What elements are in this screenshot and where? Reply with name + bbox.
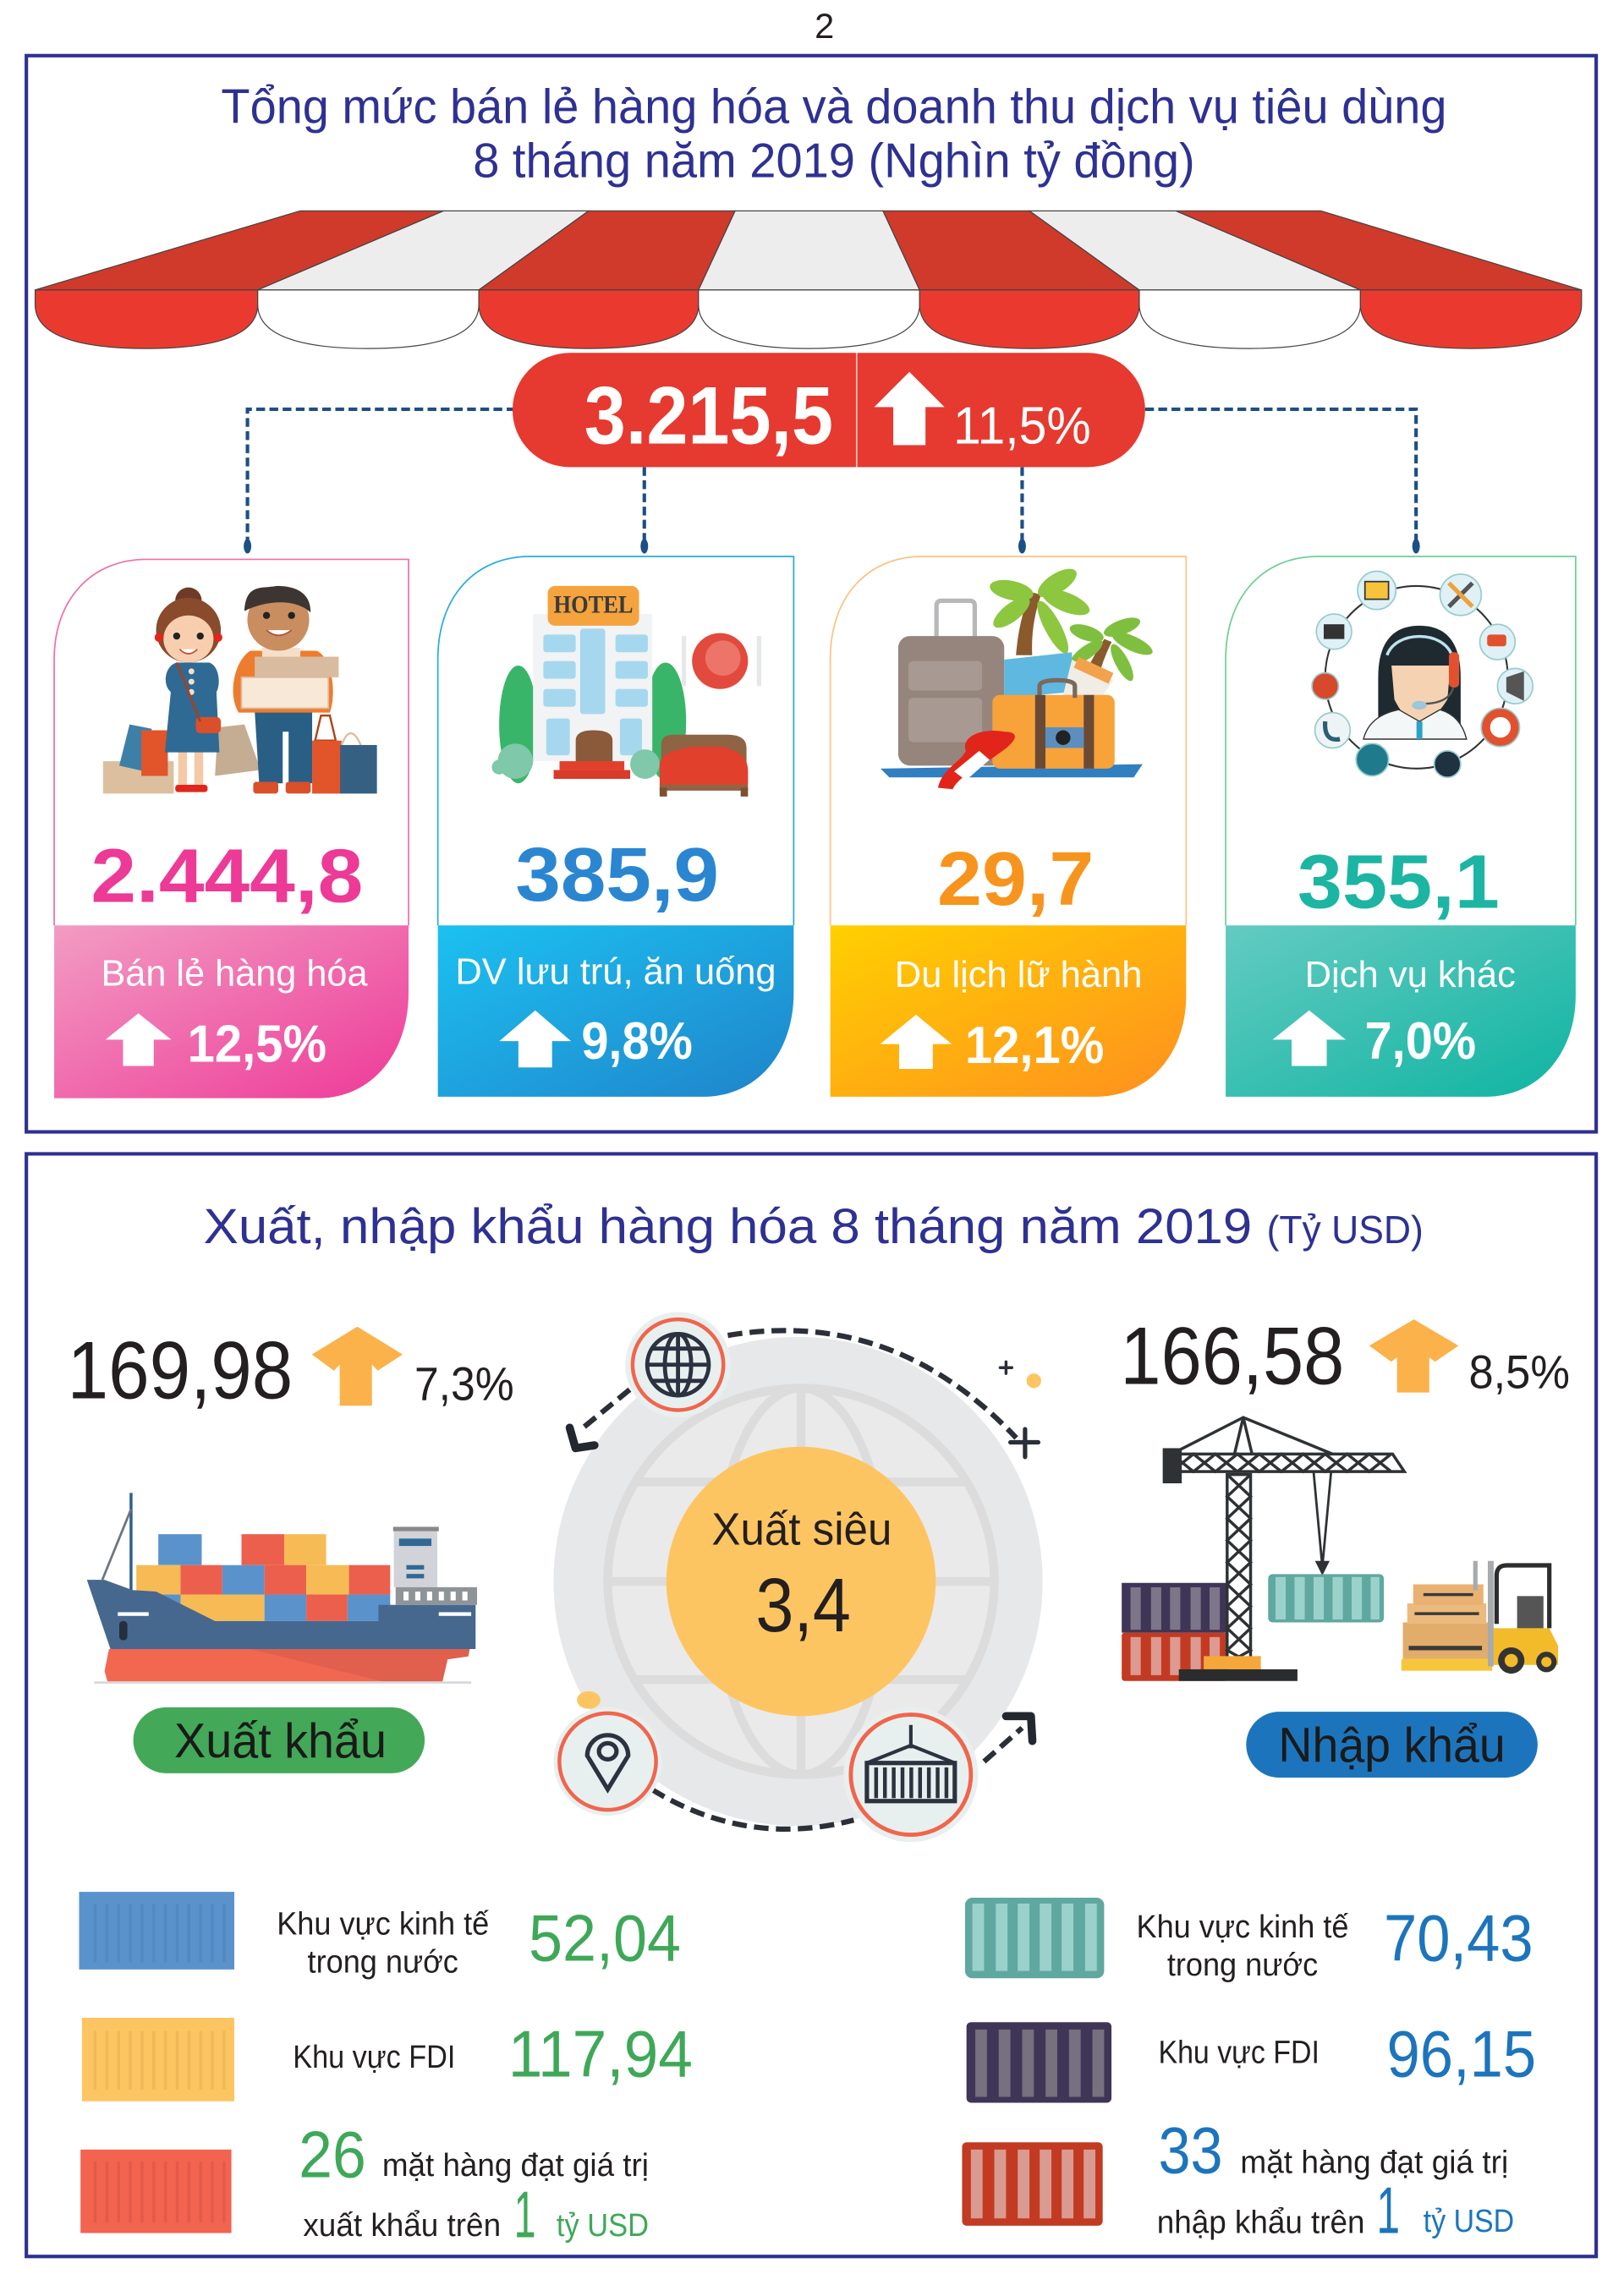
import total: 166,58 <box>1120 1309 1344 1401</box>
row: export domestic sector: Khu vực kinh tế <box>277 1906 489 1942</box>
icon: container badge <box>843 1707 979 1842</box>
icon: hotel: HOTEL <box>554 591 634 618</box>
icon: shopping couple <box>103 586 377 793</box>
export total: 7,3% <box>414 1357 514 1410</box>
panel: retail sales <box>26 56 1596 1132</box>
label pill: export <box>134 1707 425 1773</box>
row: import domestic sector <box>965 1898 1533 1983</box>
total value pill: 3.215,5 <box>584 370 833 462</box>
panel: imports and exports <box>26 1153 1596 2256</box>
row: export domestic sector: trong nước <box>308 1944 458 1980</box>
hanging teal container <box>1268 1574 1384 1623</box>
row: import commodities over 1 billion: mặt hàng đạt giá trị <box>1240 2145 1508 2181</box>
value: other services: 355,1 <box>1298 840 1500 925</box>
export total: 169,98 <box>68 1324 293 1417</box>
icon: luggage and palm trees <box>881 563 1155 789</box>
label: accommodation: DV lưu trú, ăn uống <box>455 952 776 993</box>
row: export FDI sector <box>82 2016 693 2101</box>
row: import FDI sector <box>967 2016 1536 2102</box>
icon: hotel <box>491 586 761 797</box>
icon: up arrow <box>1272 1011 1346 1066</box>
card: accommodation and food <box>438 556 793 1097</box>
surplus value circle <box>667 1447 935 1716</box>
growth: other services: 7,0% <box>1365 1012 1476 1071</box>
icon: up arrow <box>881 1015 952 1069</box>
icon: up arrow <box>499 1011 571 1067</box>
page number: 2 <box>815 6 834 46</box>
growth: travel: 12,1% <box>965 1016 1104 1075</box>
row: import FDI sector: 96,15 <box>1387 2016 1536 2091</box>
card: other services <box>1226 556 1576 1097</box>
row: import domestic sector: Khu vực kinh tế <box>1136 1910 1349 1945</box>
row: export domestic sector: 52,04 <box>529 1900 681 1975</box>
icon: crane with containers and forklift <box>1122 1417 1558 1681</box>
panel frame <box>26 56 1596 1132</box>
value: retail: 2.444,8 <box>91 834 363 919</box>
row: export commodities over 1 billion: xuất khẩu trên <box>303 2208 501 2244</box>
icon: shop awning <box>36 211 1582 348</box>
export breakdown <box>79 1892 693 2252</box>
row: export domestic sector <box>79 1892 681 1980</box>
card: travel <box>831 556 1186 1097</box>
row: import FDI sector: Khu vực FDI <box>1158 2036 1320 2071</box>
value: accommodation: 385,9 <box>515 832 719 918</box>
label pill: import <box>1246 1712 1538 1778</box>
import breakdown <box>962 1898 1536 2248</box>
heading: trade title: Xuất, nhập khẩu hàng hóa 8 tháng năm 2019 <box>204 1199 1252 1254</box>
heading: trade title: (Tỷ USD) <box>1267 1208 1424 1252</box>
central globe graphic <box>553 1312 1043 1842</box>
card: retail goods <box>54 559 409 1099</box>
export total <box>68 1324 514 1417</box>
dashed orbit arrows <box>581 1330 1022 1829</box>
row: import commodities over 1 billion: nhập khẩu trên <box>1157 2206 1365 2241</box>
label: other services: Dịch vụ khác <box>1305 955 1516 995</box>
row: import commodities over 1 billion: 33 <box>1158 2113 1223 2188</box>
growth: accommodation: 9,8% <box>581 1012 693 1071</box>
dashed connectors <box>244 409 1420 554</box>
import total: 8,5% <box>1468 1345 1570 1398</box>
surplus value circle: Xuất siêu <box>711 1504 892 1555</box>
import total <box>1120 1309 1570 1401</box>
row: export commodities over 1 billion: tỷ USD <box>557 2208 649 2244</box>
icon: globe badge <box>625 1312 731 1417</box>
row: export commodities over 1 billion: mặt hàng đạt giá trị <box>382 2148 649 2184</box>
row: export FDI sector: Khu vực FDI <box>293 2040 455 2075</box>
row: import domestic sector: 70,43 <box>1384 1900 1533 1975</box>
row: export commodities over 1 billion: 1 <box>514 2178 536 2252</box>
row: export commodities over 1 billion: 26 <box>299 2118 366 2192</box>
heading: retail title: Tổng mức bán lẻ hàng hóa và doanh thu dịch vụ tiêu dùng <box>221 79 1447 134</box>
value: travel: 29,7 <box>937 836 1094 922</box>
label pill: import: Nhập khẩu <box>1278 1718 1506 1773</box>
stacked containers <box>1122 1583 1227 1681</box>
growth: retail: 12,5% <box>188 1015 326 1073</box>
row: import domestic sector: trong nước <box>1167 1948 1318 1983</box>
icon: call-center agent with service ring <box>1312 572 1533 777</box>
surplus value circle: 3,4 <box>755 1563 851 1648</box>
total value pill: 11,5% <box>953 397 1091 456</box>
row: export FDI sector: 117,94 <box>508 2016 693 2091</box>
heading: retail title <box>221 79 1447 189</box>
row: import commodities over 1 billion: tỷ USD <box>1424 2204 1514 2239</box>
icon: container ship <box>87 1493 477 1684</box>
icon: location badge <box>553 1707 662 1816</box>
label pill: export: Xuất khẩu <box>174 1714 387 1768</box>
forklift with boxes <box>1402 1561 1558 1674</box>
label: retail: Bán lẻ hàng hóa <box>101 953 368 994</box>
row: import commodities over 1 billion <box>962 2113 1514 2248</box>
panel frame <box>26 1153 1596 2256</box>
icon: up arrow <box>106 1013 172 1066</box>
label: travel: Du lịch lữ hành <box>895 955 1142 995</box>
row: import commodities over 1 billion: 1 <box>1376 2173 1400 2248</box>
crane <box>1171 1417 1404 1663</box>
row: export commodities over 1 billion <box>80 2118 649 2252</box>
total value pill <box>513 353 1145 467</box>
heading: retail title: 8 tháng năm 2019 (Nghìn tỷ đồng) <box>473 134 1195 189</box>
